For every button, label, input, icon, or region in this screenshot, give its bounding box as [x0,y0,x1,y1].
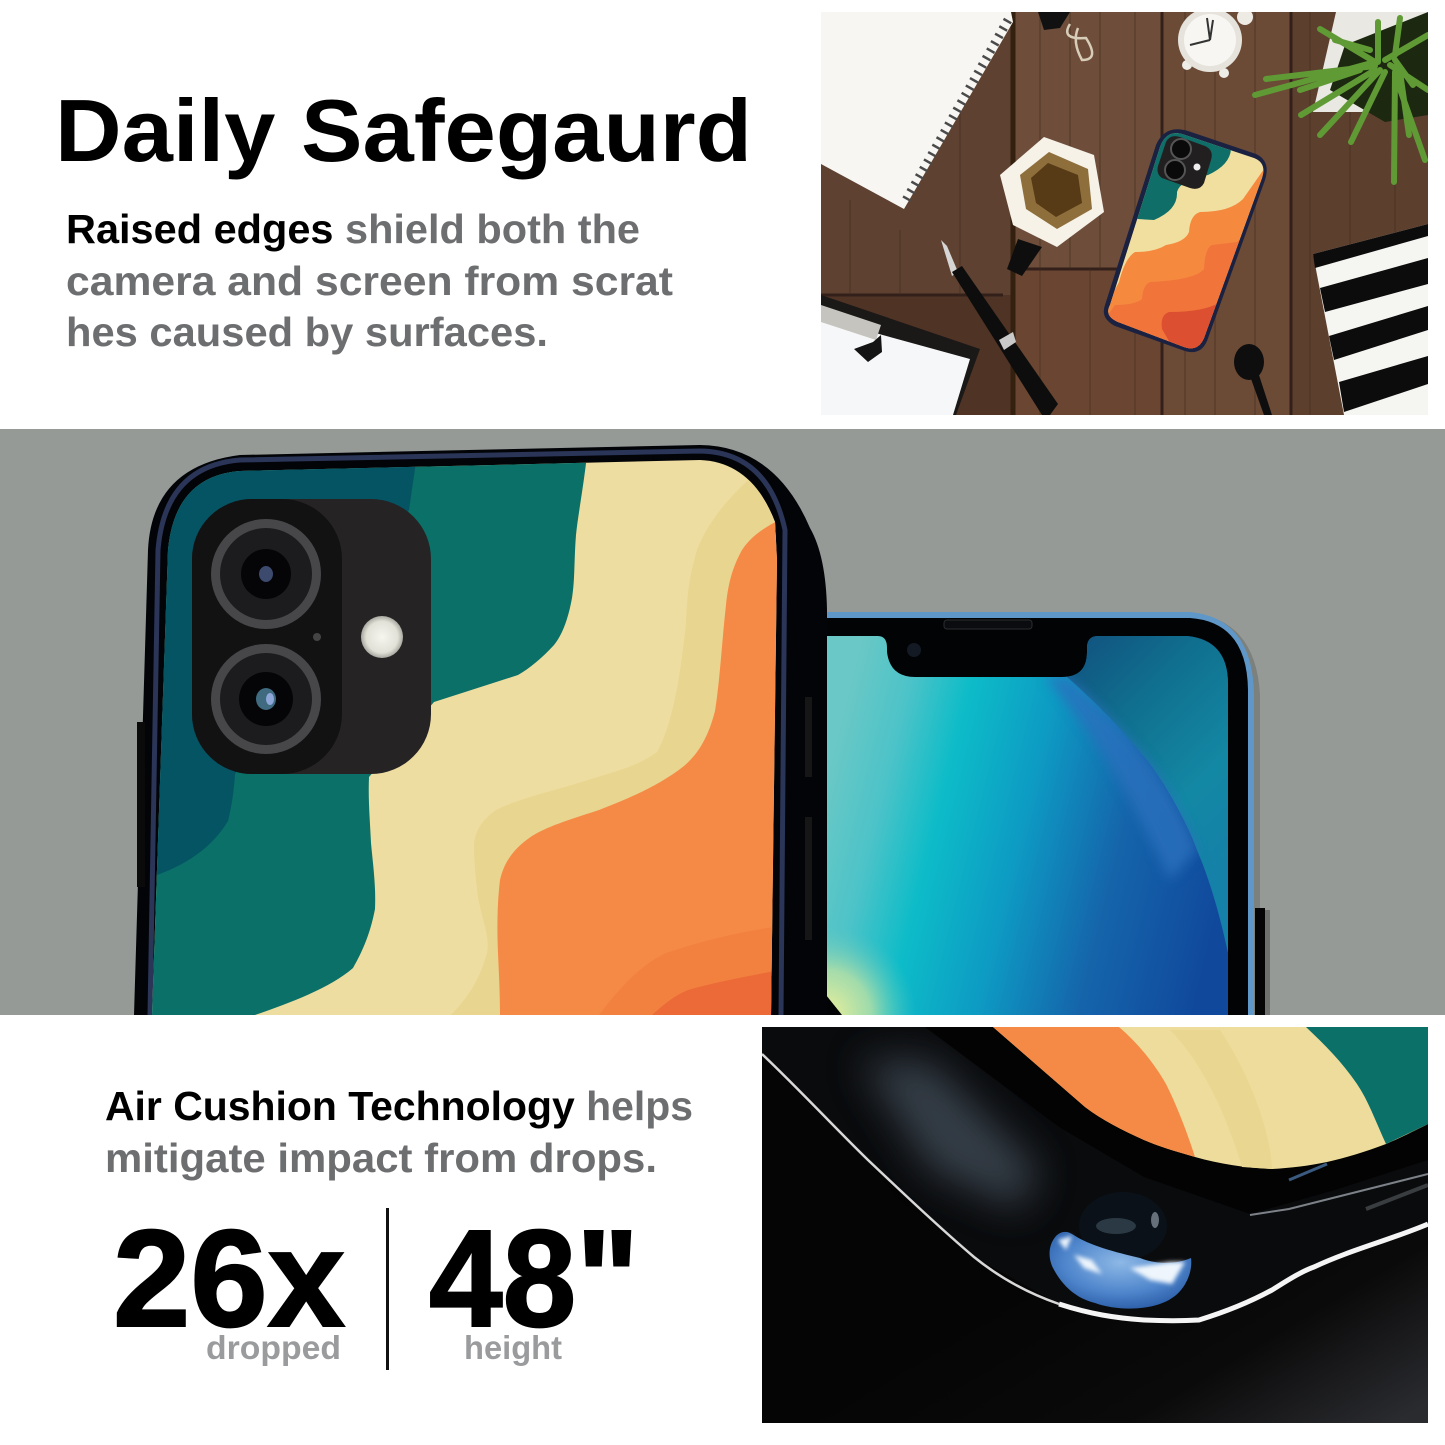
text block: raised edges: camera and screen from scrat [66,258,673,304]
stat: 26x dropped: 26x [113,1202,345,1356]
rim highlight [762,1054,1059,1304]
coffee cup [1007,239,1042,276]
notch camera [907,643,921,657]
black inner rim [925,1027,1428,1214]
text block: raised edges: hes caused by surfaces. [66,309,548,355]
darker cream fold [451,470,790,1015]
speaker [944,620,1032,629]
mini camera [1158,136,1212,189]
striped notebook [1313,224,1428,415]
title: Daily Safegaurd [55,81,752,180]
phone back with case [134,445,827,1015]
mini phone [1104,129,1267,352]
text block: raised edges: Raised edges shield both the [66,206,640,252]
flash [361,616,403,658]
side button [1265,910,1270,1015]
teal wave [150,455,587,1015]
stat: 48 inches height: 48" [429,1202,639,1356]
binder clip [1038,12,1070,30]
text block: raised edges [66,206,673,355]
air cushion text: mitigate impact from drops. [105,1135,657,1181]
divider [386,1208,389,1370]
earbud [1234,344,1272,415]
wooden planks [821,12,1292,415]
clipboard [821,295,980,415]
air cushion bubble [1050,1232,1191,1309]
side buttons [137,722,143,887]
dark teal shadow [150,455,417,875]
dome above bubble [1079,1192,1167,1260]
photo: desk flat lay with phone [821,8,1428,415]
orange wave [497,520,779,1015]
upper lens [211,519,321,629]
artwork [993,1027,1428,1169]
stat: 26x dropped: dropped [206,1329,341,1366]
notebook [821,12,1013,209]
air cushion text [105,1083,693,1181]
screen [827,636,1228,1015]
air cushion text: Air Cushion Technology helps [105,1083,693,1129]
pen [941,240,1058,415]
phone front: blue iPhone [827,612,1270,1015]
clock [1178,8,1253,78]
stat: 48 inches height: height [464,1329,562,1366]
lower lens [211,644,321,754]
navy case ring [150,451,785,1015]
gloss on case [860,1060,1040,1210]
grey band [0,429,1445,1015]
photo: air cushion corner close-up [762,1027,1428,1423]
case artwork [150,455,790,1015]
case outer [134,445,827,1015]
plant [1255,12,1428,182]
case body above rim [762,1027,1428,1320]
camera island [192,499,431,774]
case edge highlights [1250,1174,1428,1215]
